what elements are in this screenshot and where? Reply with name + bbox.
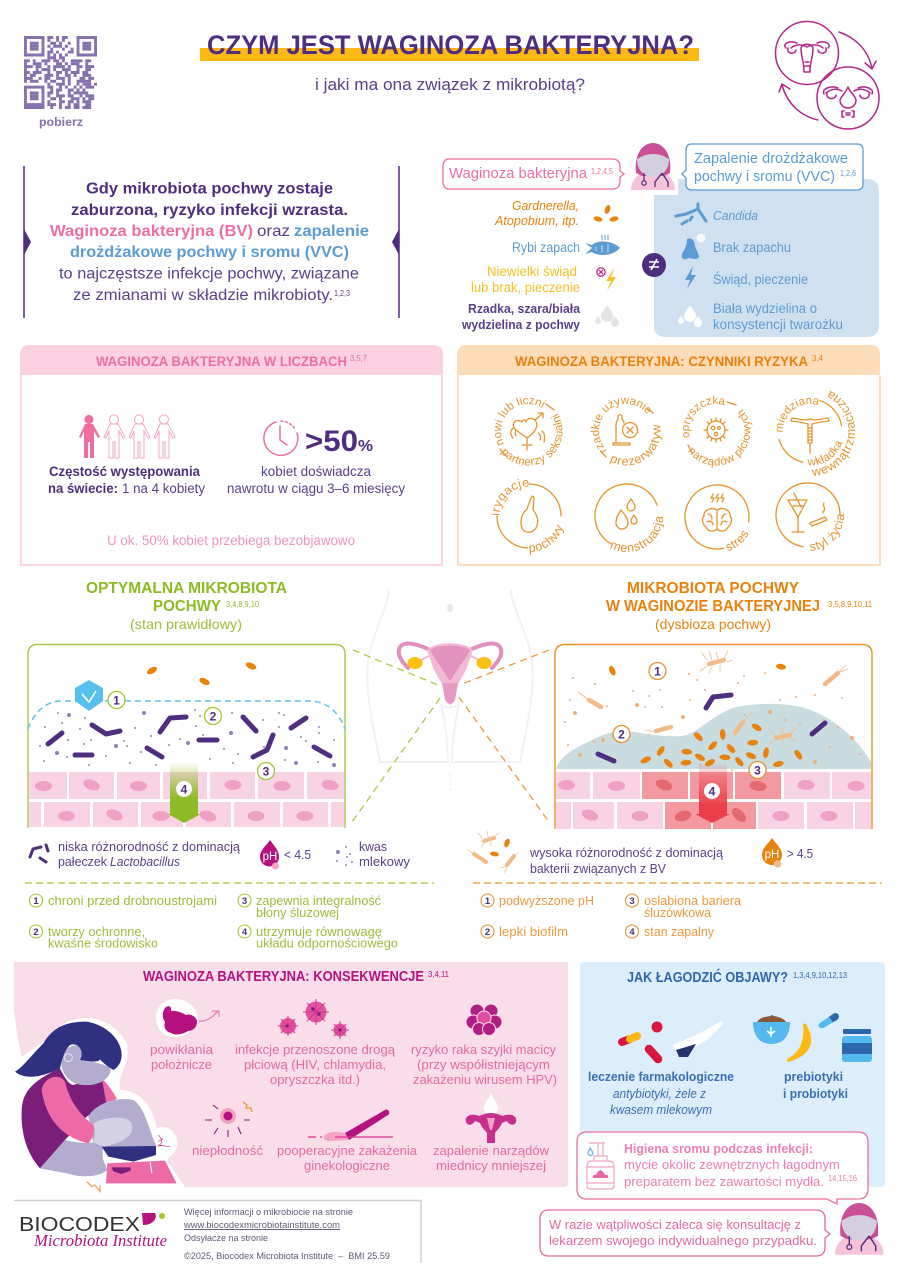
heading: BV microbiota: W WAGINOZIE BAKTERYJNEJ [606,598,820,615]
footer: ©2025, Biocodex Microbiota Institute – BMI 25.59 [184,1251,390,1262]
panel: VVC symptoms: Candida [713,208,758,223]
heading: optimal microbiota [86,580,287,632]
QR code [24,37,97,108]
list: healthy functions: układu odpornościowego [256,936,398,950]
list: healthy functions: 1 [33,896,39,907]
legend: healthy microbiota: < 4.5 [284,848,311,862]
panel: intro text: zaburzona, ryzyko infekcji wzrasta. [71,202,348,219]
panel: intro text: to najczęstsze infekcje pochwy, związane [59,266,359,282]
logo: BIOCODEX [19,1214,140,1236]
panel: consequences: pooperacyjne zakażenia [277,1143,418,1158]
callout: hygiene: mycie okolic zewnętrznych łagodnym [624,1157,840,1172]
panel: VVC symptoms [654,179,879,337]
icon: flash [685,266,696,289]
risk: partners: partnerzy seksualni [500,414,563,466]
icon: lactic acid [337,847,352,865]
panel: consequences: miednicy mniejszej [436,1158,546,1173]
panel: dysbiosis tissue diagram [555,644,872,829]
icon: cancer cells [466,1004,502,1036]
arrow: immune balance [168,762,201,823]
legend: BV microbiota: wysoka różnorodność z dominacją [529,845,724,860]
footer [14,1200,421,1263]
callout: VVC bubble [682,144,863,190]
panel: dysbiosis tissue diagram: 3 [754,764,761,778]
icon: not equal [642,253,666,277]
legend: BV microbiota: > 4.5 [787,847,813,861]
callout: hygiene [577,1132,868,1204]
risk: partners [494,396,563,466]
panel: BV symptoms: Rybi zapach [512,240,580,255]
list: BV features: osłabiona bariera [644,893,742,908]
risk: herpes: opryszczka [682,396,724,438]
heading: BV microbiota: MIKROBIOTA POCHWY [627,580,800,597]
icon: medicines [622,1021,723,1059]
panel: how to relieve symptoms: kwasem mlekowym [610,1103,712,1117]
panel: how to relieve symptoms [580,962,885,1187]
callout: BV bubble: 1,2,4,5 [591,167,613,176]
markers [108,692,274,780]
purple rods [598,695,825,761]
panel: BV in numbers: % [358,438,373,455]
legend: healthy microbiota: kwas [359,839,387,854]
callout: BV bubble: Waginoza bakteryjna [449,165,588,182]
subtitle: i jaki ma ona związek z mikrobiotą? [315,76,585,94]
panel: risk factors: 3,4 [812,354,824,363]
icon: fish [585,235,620,255]
tissue cells [29,772,344,827]
icon: shield [75,680,103,711]
panel: consequences: ryzyko raka szyjki macicy [411,1042,556,1057]
list: healthy functions: chroni przed drobnoustrojami [48,893,217,908]
icon: pH drop [260,840,279,870]
panel: how to relieve symptoms: leczenie farmakologiczne [588,1069,734,1084]
callout: BV bubble [443,159,624,189]
icon: pH drop: pH [263,851,277,863]
panel: intro text: ze zmianami w składzie mikrobioty. [73,287,333,304]
heading: BV microbiota [606,580,873,632]
panel: consequences: płciową (HIV, chlamydia, [244,1057,386,1072]
icon: BV bacteria [468,831,519,873]
risk: menstruation: menstruacja [610,516,664,552]
icon: doctor [631,143,675,190]
markers [613,662,766,778]
panel: how to relieve symptoms: JAK ŁAGODZIĆ OBJAWY? [627,968,788,986]
panel: intro text: Waginoza bakteryjna (BV) [50,223,253,240]
icon: soap bottle [587,1143,614,1189]
panel: intro text: oraz [257,223,290,240]
panel: dysbiosis tissue diagram: 1 [654,664,661,678]
icon: fetus [156,999,219,1037]
panel: consequences: (przy współistniejącym [417,1057,550,1072]
risk: condom: rzadkie używanie [590,398,651,454]
lactic acid dots [40,710,334,765]
risk: IUD: miedziana [776,398,818,432]
QR caption: pobierz [39,117,83,129]
footer: www.biocodexmicrobiotainstitute.com [183,1220,340,1231]
panel: BV in numbers: na świecie: [48,481,118,496]
panel: BV in numbers: kobiet doświadcza [261,464,371,479]
connector lines [352,650,549,822]
icon: uterus cycle [776,22,879,129]
risk: stress: stres [726,530,748,551]
panel: consequences: powikłania [150,1042,214,1057]
panel: healthy tissue diagram: 4 [181,782,188,796]
list: BV features: 4 [629,927,635,938]
callout: hygiene: 14,15,16 [828,1174,858,1183]
icon: infertility [205,1102,252,1137]
flagellated bacteria [578,651,848,745]
panel: consequences: ginekologiczne [304,1158,390,1173]
panel: BV in numbers: WAGINOZA BAKTERYJNA W LICZBACH [96,353,347,369]
list: healthy functions: błony śluzowej [256,905,339,920]
panel: intro text: Gdy mikrobiota pochwy zostaje [86,180,333,198]
legend: healthy microbiota: niska różnorodność z dominacją [58,839,241,854]
legend: BV microbiota: bakterii związanych z BV [530,861,666,876]
panel: dysbiosis tissue diagram: 4 [709,784,716,798]
callout: VVC bubble: Zapalenie drożdżakowe [694,151,848,167]
list: healthy functions: kwaśne środowisko [48,936,158,950]
risk: douche [490,478,564,555]
panel: consequences: WAGINOZA BAKTERYJNA: KONSEKWENCJE [143,969,424,985]
icon: white drops [678,305,702,327]
panel: intro text: drożdżakowe pochwy i sromu (VVC) [70,244,349,261]
title: CZYM JEST WAGINOZA BAKTERYJNA? [207,30,694,60]
panel: BV in numbers: nawrotu w ciągu 3–6 miesięcy [227,481,405,496]
panel: BV symptoms [461,199,620,332]
panel: BV in numbers: 1 na 4 kobiety [122,481,205,496]
panel: dysbiosis tissue diagram: 2 [618,728,625,742]
illustration: sitting woman [10,1010,185,1200]
list: BV features [481,893,742,939]
icon: bacteria seeds [593,204,619,222]
heading: optimal microbiota: POCHWY [153,598,222,615]
callout: VVC bubble: pochwy i sromu (VVC) [694,169,835,185]
heading: optimal microbiota: 3,4,8,9,10 [226,600,260,609]
panel: risk factors: WAGINOZA BAKTERYJNA: CZYNNIKI RYZYKA [515,353,808,369]
list: BV features: 1 [485,896,491,907]
risk: douche: pochwy [529,524,564,555]
icon: pH drop: pH [765,849,779,861]
callout: consult a doctor: W razie wątpliwości zaleca się konsultację z [549,1217,801,1232]
icon: four women [79,415,175,458]
lactobacillus rods [48,717,330,757]
callout: hygiene: Higiena sromu podczas infekcji: [624,1141,813,1156]
illustration: body with uterus [367,590,533,790]
risk: herpes: narządów płciowych [688,409,752,468]
panel: consequences: opryszczka itd.) [270,1072,360,1087]
panel: intro text: 1,2,3 [334,289,350,298]
panel: BV symptoms: Rzadka, szara/biała [468,302,581,316]
icon: scalpel [308,1110,393,1141]
panel: how to relieve symptoms: 1,3,4,9,10,12,13 [793,971,848,980]
orange bacteria [146,661,257,687]
list: healthy functions: utrzymuje równowagę [256,924,382,939]
icon: grey drops [595,305,619,327]
tissue cells [556,772,871,829]
risk: IUD [776,390,856,476]
risk: stress [684,484,750,551]
BV bacteria [608,663,804,769]
panel: VVC symptoms: konsystencji twarożku [713,317,843,332]
list: healthy functions: zapewnia integralność [256,893,381,908]
panel: healthy tissue diagram: 1 [113,694,120,708]
list: BV features: śluzówkowa [644,905,712,920]
panel: how to relieve symptoms: antybiotyki, żele z [613,1087,707,1101]
callout: consult a doctor [540,1210,830,1256]
panel: intro text [23,166,400,318]
panel: BV symptoms: Niewielki świąd [487,264,577,279]
biofilm [556,704,871,769]
panel: VVC symptoms: Brak zapachu [713,240,791,255]
risk: condom: prezerwatyw [609,424,662,466]
panel: BV symptoms: Gardnerella, [512,199,579,213]
legend: healthy microbiota [30,839,410,870]
panel: healthy tissue diagram: 3 [263,764,270,778]
panel: intro text: zapalenie [294,223,369,240]
heading: BV microbiota: (dysbioza pochwy) [655,616,771,632]
icon: prebiotics and probiotics [753,1013,872,1062]
icon: clock [264,421,298,455]
panel: risk factors [457,345,881,566]
panel: VVC symptoms: Świąd, pieczenie [713,272,808,287]
legend: healthy microbiota: Lactobacillus [110,854,180,869]
list: healthy functions: tworzy ochronne, [48,924,145,939]
list: BV features: stan zapalny [644,924,714,939]
list: BV features: podwyższone pH [499,893,594,908]
list: healthy functions: 3 [242,896,247,907]
panel: consequences [14,962,568,1187]
orange dots [565,673,860,770]
callout: hygiene: preparatem bez zawartości mydła. [624,1174,824,1189]
heading: optimal microbiota: (stan prawidłowy) [130,616,242,632]
icon: candida [676,204,706,224]
panel: healthy tissue diagram [28,644,345,828]
footer: Więcej informacji o mikrobiocie na stronie [184,1207,353,1218]
callout: consult a doctor: lekarzem swojego indywidualnego przypadku. [549,1233,817,1248]
list: healthy functions: 4 [242,927,248,938]
panel: how to relieve symptoms: i probiotyki [783,1086,848,1101]
list: BV features: lepki biofilm [499,924,568,939]
list: BV features: 2 [485,927,490,938]
panel: consequences: infekcje przenoszone drogą [235,1042,396,1057]
panel: how to relieve symptoms: prebiotyki [784,1069,843,1084]
footer: Odsyłacze na stronie [184,1233,268,1244]
panel: consequences: 3,4,11 [428,970,450,979]
list: healthy functions [30,893,398,950]
heading: optimal microbiota: OPTYMALNA MIKROBIOTA [86,580,287,597]
icon: pH drop [762,838,782,868]
panel: BV in numbers [20,345,443,565]
legend: healthy microbiota: mlekowy [359,854,410,869]
risk: menstruation [594,483,664,552]
panel: BV in numbers: >50 [305,425,358,458]
panel: BV symptoms: lub brak, pieczenie [471,280,580,295]
logo: Microbiota Institute [33,1231,167,1250]
icon: flash with cross [597,267,616,291]
panel: BV in numbers: U ok. 50% kobiet przebiega bezobjawowo [107,533,355,548]
panel: consequences: zapalenie narządów [433,1143,550,1158]
panel: BV symptoms: Atopobium, itp. [494,214,579,228]
icon: viruses [278,999,349,1039]
icon: doctor [835,1203,883,1255]
list: healthy functions: 2 [33,927,39,938]
panel: consequences: położnicze [151,1057,212,1072]
legend: healthy microbiota: pałeczek [58,854,107,869]
panel: consequences: zakażeniu wirusem HPV) [413,1072,557,1087]
arrow: inflammation [695,762,730,823]
risk: partners: nowi lub liczni [494,396,546,446]
legend: BV microbiota [468,831,813,876]
icon: inflamed uterus [466,1093,516,1143]
icon: nose [682,234,706,259]
protective layer [28,701,345,729]
callout: VVC bubble: 1,2,6 [840,169,856,178]
panel: consequences: niepłodność [192,1143,264,1158]
list: BV features: 3 [629,896,635,907]
risk: IUD: wkładka [807,441,843,466]
risk: lifestyle: styl życia [810,514,844,551]
heading: BV microbiota: 3,5,8,9,10,11 [828,600,873,609]
risk: lifestyle [775,482,844,551]
panel: BV in numbers: 3,5,7 [350,354,368,363]
risk: douche: irygacje [490,478,529,516]
panel: healthy tissue diagram: 2 [210,710,217,724]
panel: BV symptoms: wydzielina z pochwy [461,318,580,332]
panel: VVC symptoms: Biała wydzielina o [713,301,817,316]
logo [19,1213,167,1250]
risk: IUD: wewnątrzmaciczna [812,390,856,476]
panel: BV in numbers: Częstość występowania [49,464,200,479]
icon: lactobacilli [30,845,48,862]
